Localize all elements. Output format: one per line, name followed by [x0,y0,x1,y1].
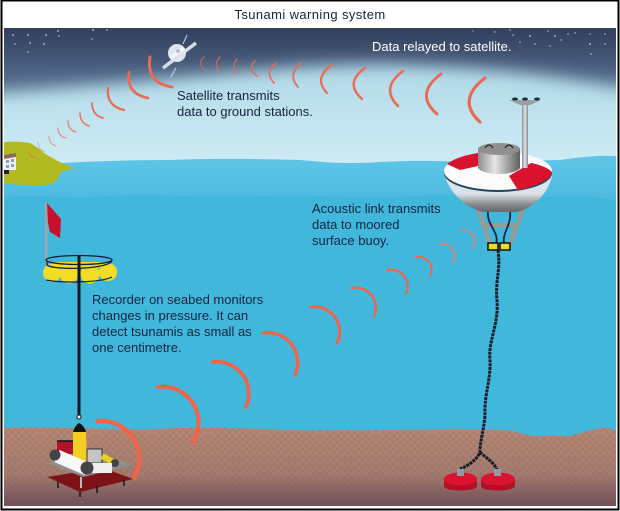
recorder cable [78,256,80,416]
signal arcs: seabed recorder to buoy [98,230,475,478]
label: data relayed: Data relayed to satellite. [372,39,511,54]
label: recorder: detect tsunamis as small as [92,324,252,339]
mast with antenna [509,98,541,168]
seabed recorder [47,415,133,497]
land with ground station [4,142,75,185]
title: Tsunami warning system [234,7,386,22]
label: acoustic link: data to moored [312,217,399,232]
signal arcs: satellite to ground station [29,57,172,158]
satellite [163,35,196,77]
hull [445,176,552,212]
label: recorder: one centimetre. [92,340,182,355]
label: satellite transmits: Satellite transmits [177,88,280,103]
moored surface buoy [444,98,552,250]
seabed [4,428,616,506]
label: recorder: changes in pressure. It can [92,308,248,323]
label: satellite transmits: data to ground stations. [177,104,313,119]
stars [12,29,606,55]
building [4,153,16,174]
deck [444,152,552,192]
label: acoustic link: Acoustic link transmits [312,201,441,216]
frame under hull [478,209,523,250]
sky background [4,28,616,163]
cylinder housing [478,143,520,174]
anchor weights [444,469,515,490]
sea [4,156,616,450]
label: recorder: Recorder on seabed monitors [92,292,263,307]
surface marker float with flag [43,203,117,284]
label: acoustic link: surface buoy. [312,233,389,248]
mooring chain [460,250,499,470]
signal arcs: buoy to satellite [201,57,485,122]
